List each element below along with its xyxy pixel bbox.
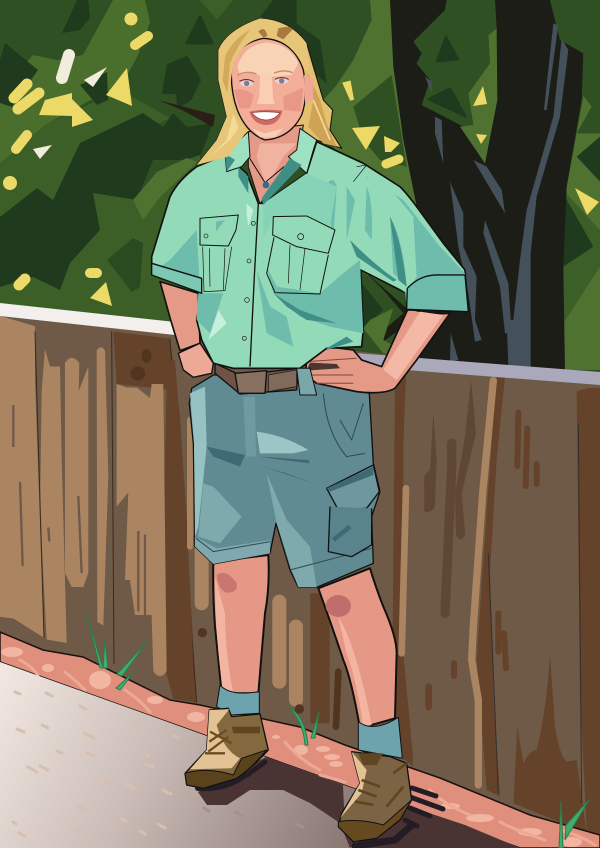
- right boot: [338, 752, 412, 842]
- socks: [217, 685, 402, 758]
- shadow under boots: [198, 757, 520, 848]
- wooden fence: [0, 303, 600, 848]
- fence top rail white: [0, 303, 175, 335]
- left hand: [178, 343, 213, 377]
- face: [231, 38, 305, 140]
- left leg: [213, 555, 269, 693]
- fence streaks centre: [170, 360, 428, 760]
- left boot: [185, 708, 268, 788]
- eyes: [237, 71, 293, 86]
- foliage shapes left: [0, 0, 233, 330]
- person: [152, 18, 468, 842]
- foliage shapes behind head: [260, 0, 417, 358]
- left sleeve cuff: [152, 263, 202, 293]
- hair back: [197, 18, 342, 165]
- tree trunk: [380, 0, 600, 370]
- right sleeve cuff: [407, 275, 468, 312]
- necklace: [249, 157, 284, 188]
- shirt tail over belt: [297, 368, 317, 395]
- shorts: [189, 375, 380, 587]
- ground: pink verge: [0, 632, 600, 848]
- shirt body: [152, 142, 468, 368]
- right forearm: [305, 308, 450, 393]
- pavement flecks: [13, 692, 303, 836]
- upper body: [152, 18, 468, 395]
- left chest pocket: [200, 215, 238, 292]
- right leg: [318, 568, 397, 728]
- fence top rail grey: [355, 353, 600, 385]
- grass tufts: [86, 612, 589, 848]
- right boot shadow strokes: [198, 762, 443, 846]
- lower body: [185, 375, 412, 842]
- left forearm: [160, 282, 200, 351]
- white leaf highlights: [33, 55, 107, 159]
- fence streaks right: [393, 377, 600, 837]
- pavement: [0, 662, 520, 848]
- right chest pocket: [267, 216, 335, 294]
- neck and chest: [248, 125, 303, 204]
- fence planks left: [0, 316, 197, 702]
- verge highlights: [1, 647, 582, 847]
- fingers right hand: [305, 358, 357, 383]
- smile: [249, 110, 283, 125]
- collar: [225, 128, 317, 205]
- yellow leaf highlights: [3, 12, 599, 306]
- verge mottling: [20, 660, 595, 845]
- hair front: [197, 18, 337, 165]
- background foliage: [0, 0, 600, 390]
- belt: [215, 363, 298, 394]
